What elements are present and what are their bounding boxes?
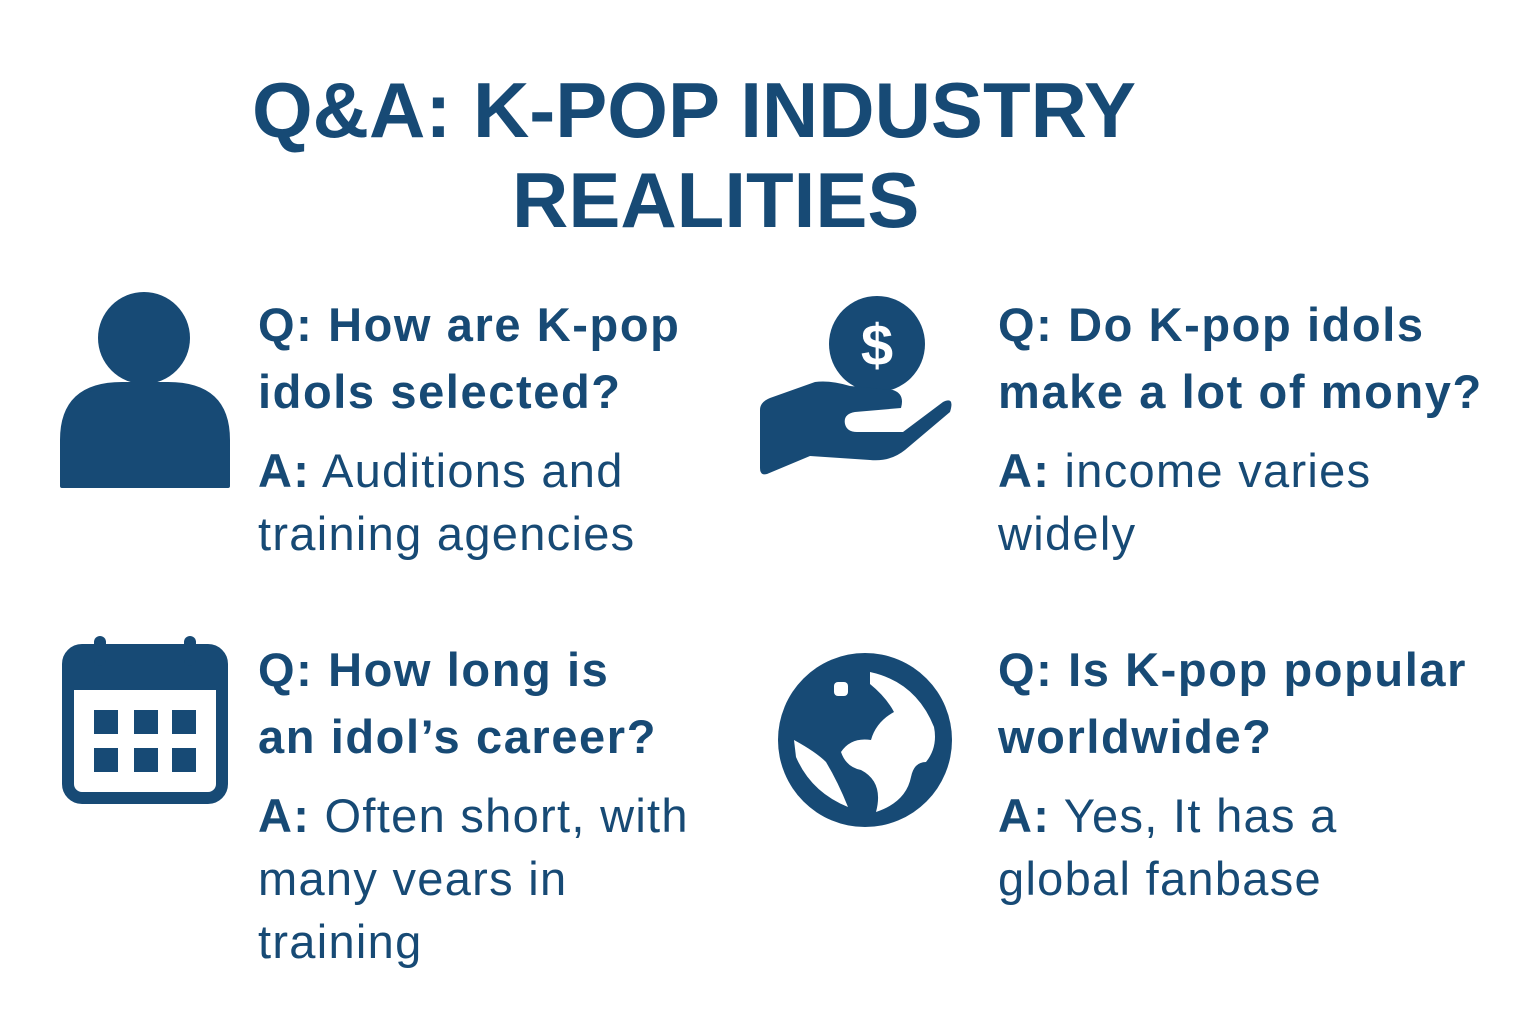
panel: selection: training agencies	[258, 507, 635, 560]
title: Q&A: K-POP INDUSTRY	[252, 66, 1136, 154]
panel: money	[998, 298, 1483, 560]
icon: calendar	[62, 636, 228, 804]
panel: career	[258, 643, 689, 968]
panel: money: widely	[998, 507, 1136, 560]
panel: money: make a lot of mony?	[998, 365, 1483, 418]
panel: career: many vears in	[258, 852, 567, 905]
title	[252, 66, 1136, 244]
panel: selection: A: Auditions and	[258, 444, 624, 497]
panel: selection: idols selected?	[258, 365, 622, 418]
panel: career: A: Often short, with	[258, 789, 689, 842]
panel: career: Q: How long is	[258, 643, 609, 696]
icon: hand with dollar: $	[861, 313, 893, 378]
panel: worldwide: A: Yes, It has a	[998, 789, 1338, 842]
title: REALITIES	[512, 156, 919, 244]
panel: career: an idol’s career?	[258, 710, 657, 763]
icon: person	[60, 292, 230, 488]
icon: hand with dollar	[760, 296, 952, 474]
panel: worldwide	[998, 643, 1467, 905]
panel: career: training	[258, 915, 423, 968]
panel: selection	[258, 298, 680, 560]
panel: selection: Q: How are K-pop	[258, 298, 680, 351]
panel: money: A: income varies	[998, 444, 1371, 497]
panel: money: Q: Do K-pop idols	[998, 298, 1425, 351]
panel: worldwide: worldwide?	[998, 710, 1272, 763]
panel: worldwide: global fanbase	[998, 852, 1322, 905]
icon: globe	[778, 653, 952, 827]
panel: worldwide: Q: Is K-pop popular	[998, 643, 1467, 696]
